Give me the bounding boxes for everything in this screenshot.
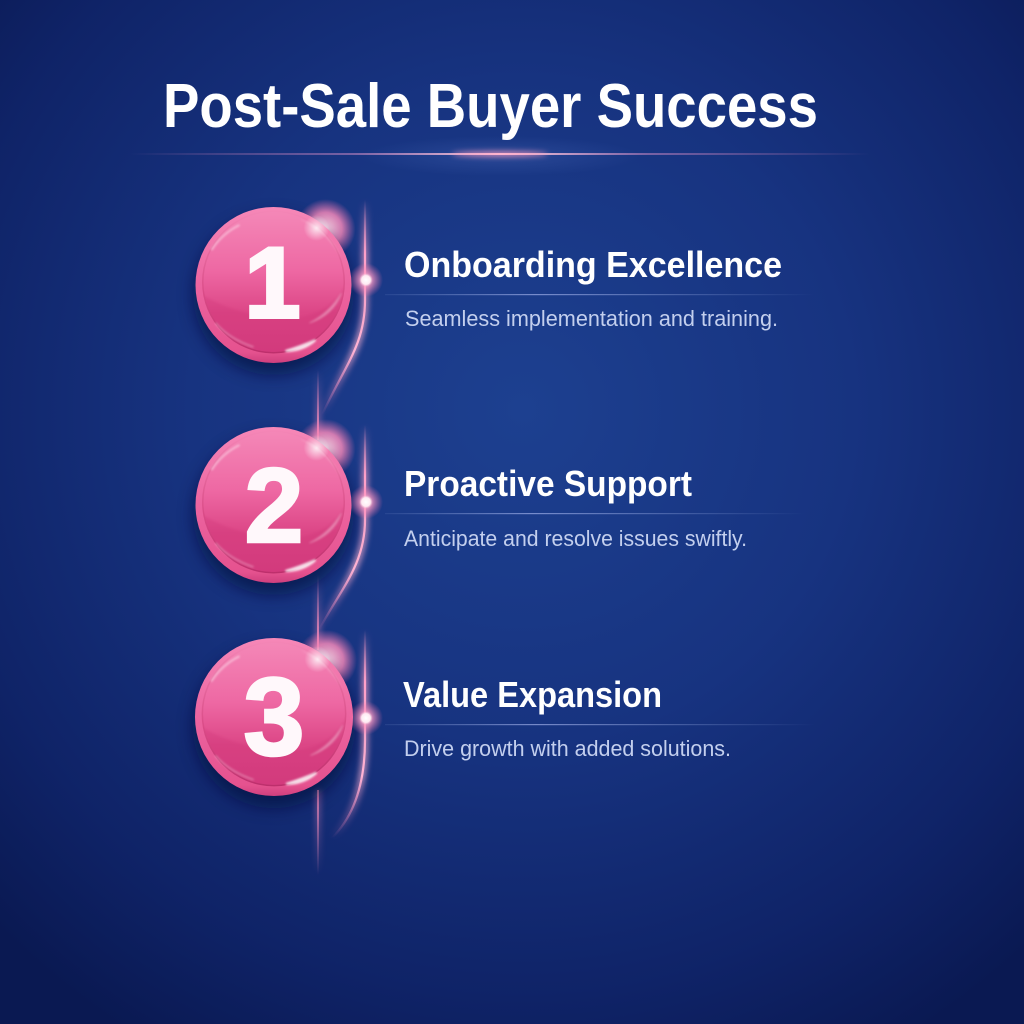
step 3 badge — [193, 630, 357, 808]
step 2 node — [349, 485, 383, 519]
connector: timeline curves — [315, 200, 365, 875]
step 2 — [194, 419, 805, 595]
step 1 badge: 1 — [245, 227, 300, 338]
step 3 node — [349, 701, 383, 735]
step 1 badge — [194, 199, 356, 375]
step 3 badge: 3 — [243, 656, 305, 779]
step 3 heading: Value Expansion — [403, 674, 662, 715]
title underline glow — [130, 136, 870, 176]
step 1 node — [349, 263, 383, 297]
step 2 badge: 2 — [245, 447, 303, 565]
step 1 — [194, 199, 815, 375]
step 2 badge — [194, 419, 356, 595]
step 3 — [193, 630, 815, 808]
step 3 description: Drive growth with added solutions. — [404, 736, 731, 761]
step 2 heading: Proactive Support — [404, 463, 692, 504]
step 1 heading: Onboarding Excellence — [404, 244, 782, 285]
title: Post-Sale Buyer Success — [163, 72, 818, 141]
step 1 description: Seamless implementation and training. — [405, 306, 778, 331]
step 2 description: Anticipate and resolve issues swiftly. — [404, 526, 747, 551]
